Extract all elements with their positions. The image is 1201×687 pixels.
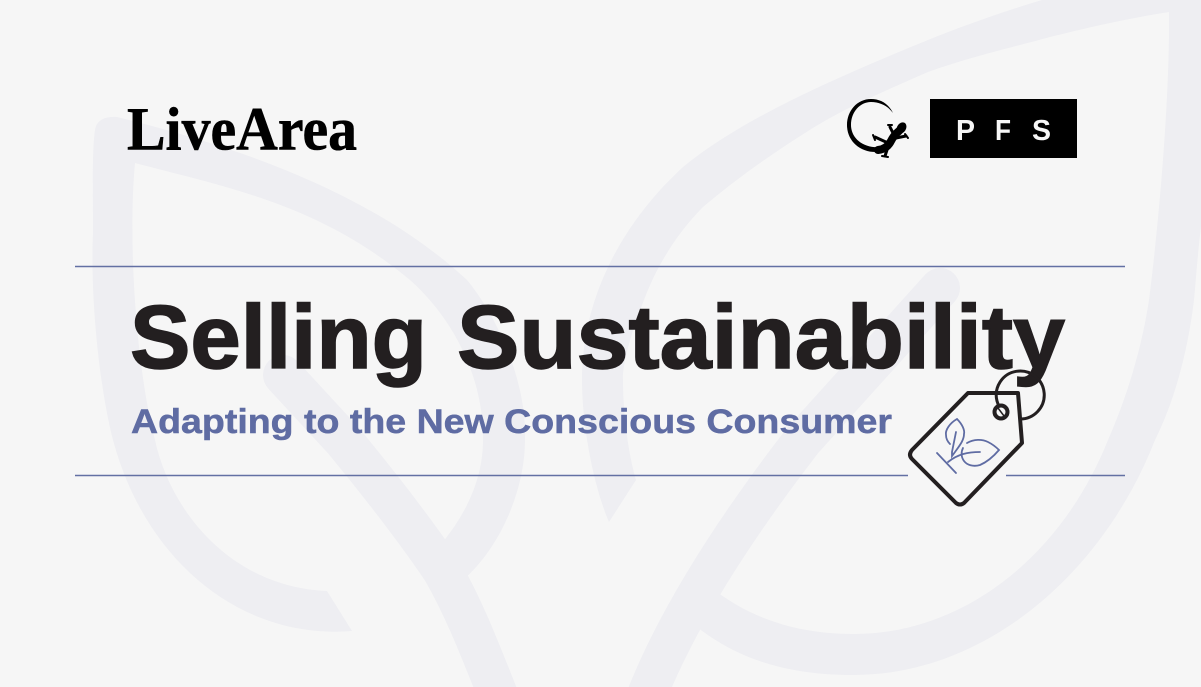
logo: PFS box: F (995, 115, 1011, 147)
bottom rule (75, 474, 1125, 476)
subtitle: Adapting to the New Conscious Consumer (131, 403, 892, 441)
title (130, 288, 1065, 388)
logo: lizard ring (847, 99, 908, 157)
logo: PFS box: P (956, 115, 975, 147)
background watermark: right leaf (582, 0, 1201, 687)
title: Sustainability (457, 288, 1065, 388)
top rule (75, 266, 1125, 268)
icon: price tag with leaves (910, 371, 1044, 504)
logo: LiveArea: LiveArea (127, 96, 357, 164)
logo: PFS box: S (1032, 115, 1051, 147)
icon: leaf sprout (937, 419, 999, 473)
logo: PFS box (930, 99, 1077, 158)
background watermark: left leaf (92, 117, 525, 687)
title: Selling (130, 288, 427, 388)
